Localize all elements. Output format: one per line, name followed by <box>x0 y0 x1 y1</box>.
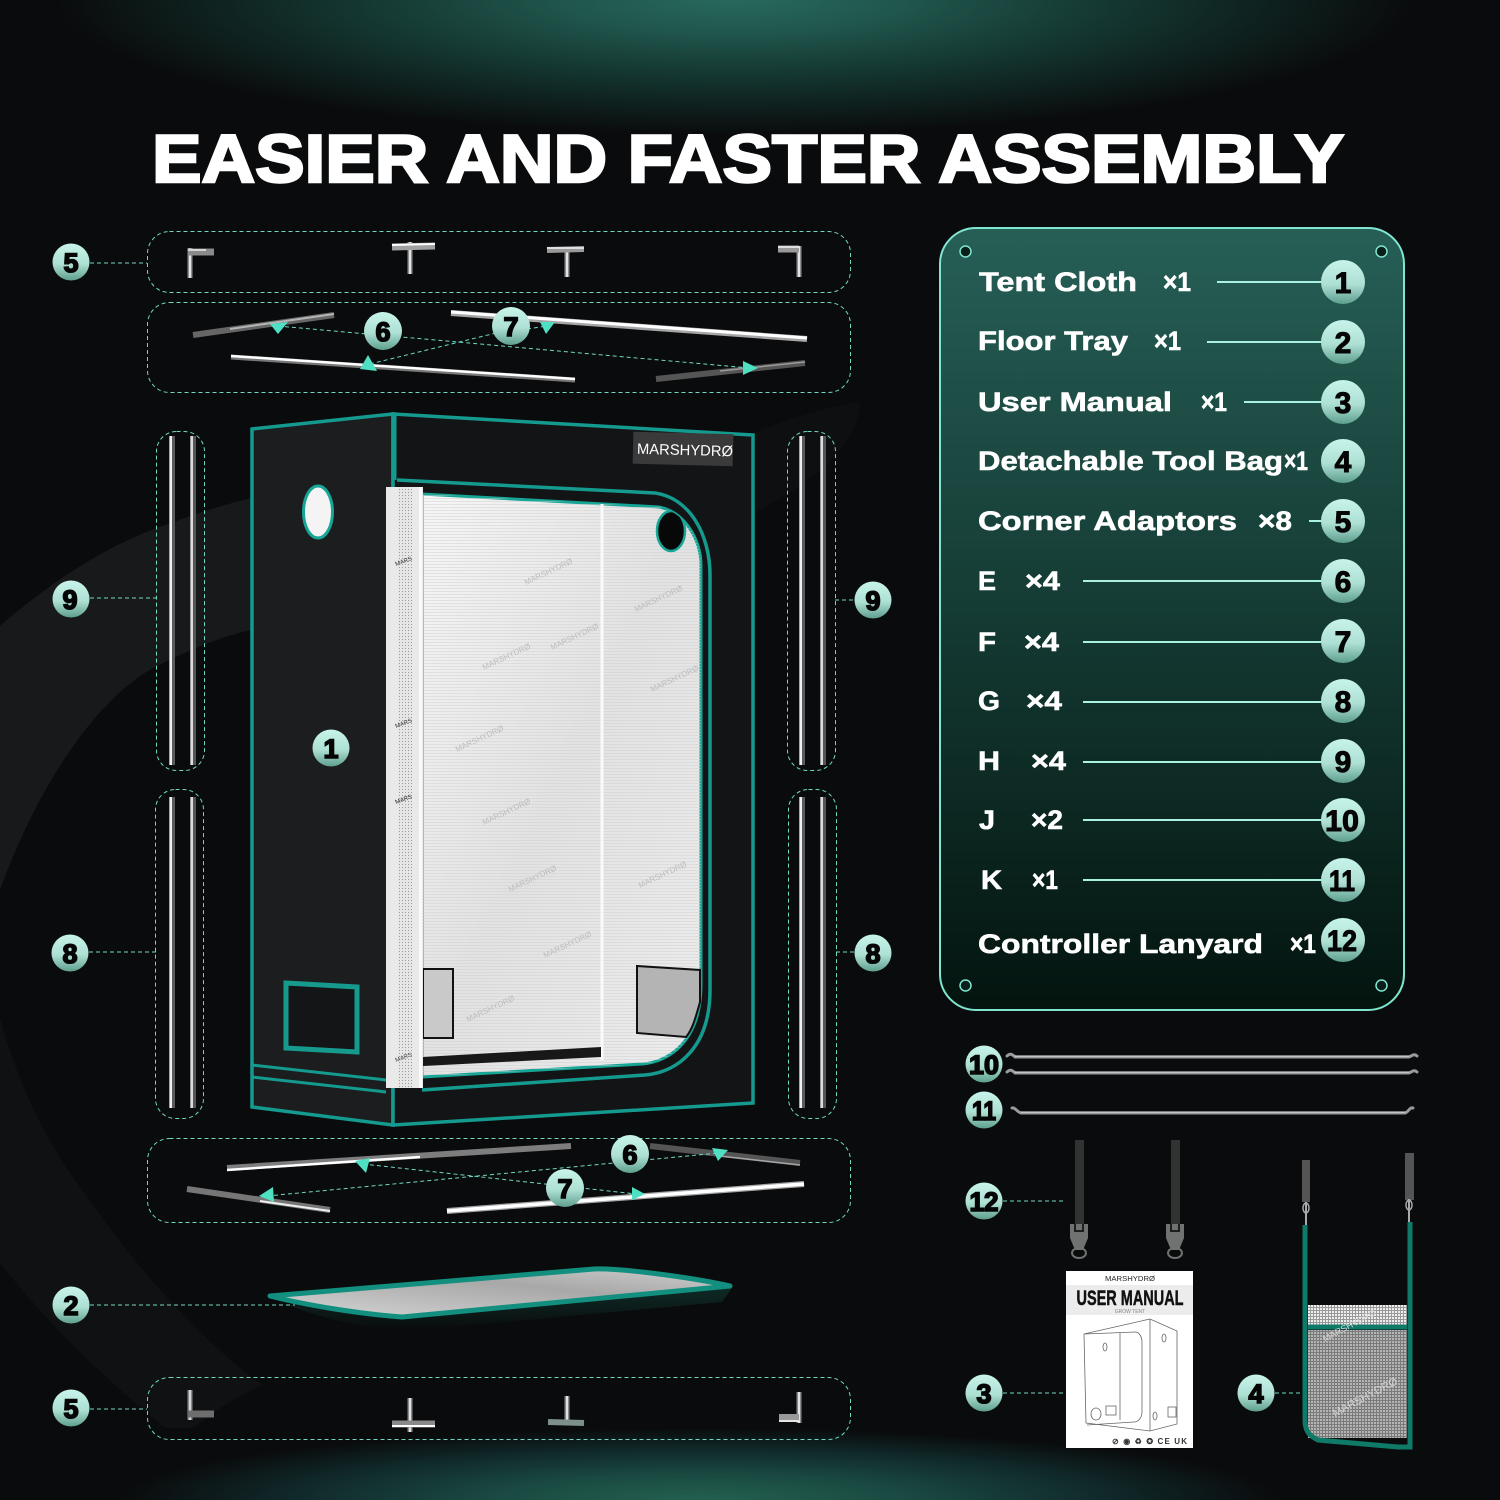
row 7 <box>978 619 1365 663</box>
tent front panel <box>393 414 753 1125</box>
tent <box>252 414 753 1125</box>
row 8 <box>978 679 1365 723</box>
detachable tool bag: MARSHYDRØ <box>1331 1375 1400 1420</box>
rods J <box>1007 1054 1417 1073</box>
row 12: 12 <box>1327 925 1357 958</box>
adaptor: top left <box>188 248 214 278</box>
row 9: ×4 <box>1031 746 1066 776</box>
side rectangular window <box>286 983 357 1052</box>
row 7: ×4 <box>1024 627 1059 657</box>
title: EASIER AND FASTER ASSEMBLY <box>152 121 1344 197</box>
watermarks: MARSHYDRØ <box>542 930 593 960</box>
badge: 8 left: 8 <box>62 939 78 969</box>
group: right lower tubes G <box>788 790 836 1118</box>
badge: 1 on tent <box>312 730 350 766</box>
badge: 8 right: 8 <box>865 939 881 969</box>
user manual: GROW TENT <box>1115 1309 1145 1315</box>
adaptor: top middle right <box>547 248 584 277</box>
rolled door column: MARS <box>395 1052 413 1064</box>
badge: 7: 7 <box>503 312 519 342</box>
row 11: K <box>981 865 1003 895</box>
row 6: E <box>978 566 996 596</box>
watermarks: MARSHYDRØ <box>633 584 684 614</box>
rod K <box>1012 1108 1413 1113</box>
adaptor: top right <box>778 246 799 277</box>
badge: 5 top: 5 <box>63 248 79 278</box>
rolled door column: MARS <box>395 718 413 730</box>
door opening <box>422 494 701 1077</box>
row 2: ×1 <box>1154 326 1181 356</box>
group: left lower tubes G <box>156 790 204 1118</box>
row 12: Controller Lanyard <box>978 929 1263 959</box>
row 8: 8 <box>1335 686 1351 719</box>
panel: upper corner adaptors <box>148 232 850 292</box>
badge: 6: 6 <box>375 317 391 347</box>
row 10: ×2 <box>1031 805 1063 835</box>
row 12 <box>978 918 1365 962</box>
controller lanyard right <box>1166 1140 1184 1258</box>
user manual <box>1066 1271 1193 1448</box>
badge: 6: 6 <box>622 1140 638 1170</box>
adaptor: bottom middle left <box>392 1398 435 1432</box>
badge: 12 <box>966 1182 1002 1220</box>
row 1: Tent Cloth <box>979 267 1137 297</box>
badge: 11 <box>966 1092 1002 1128</box>
adaptor: bottom left <box>188 1390 214 1420</box>
watermarks: MARSHYDRØ <box>637 860 688 890</box>
manual tent drawing <box>1084 1319 1177 1431</box>
tube: upper right F <box>451 312 807 339</box>
adaptor: bottom right <box>779 1392 799 1423</box>
adaptor: bottom middle right <box>548 1396 584 1425</box>
badge: 6 <box>364 312 402 350</box>
side round vent <box>304 486 332 538</box>
door seam <box>600 504 604 1060</box>
badge: 3 <box>966 1374 1002 1412</box>
panel: lower corner adaptors <box>148 1378 850 1440</box>
badge: 7: 7 <box>557 1174 573 1204</box>
watermarks: MARSHYDRØ <box>523 557 574 587</box>
row 3: ×1 <box>1201 387 1227 417</box>
door outer trim <box>397 480 710 1090</box>
row 11: ×1 <box>1032 865 1058 895</box>
row 4: 4 <box>1335 446 1352 479</box>
row 9: 9 <box>1335 746 1351 779</box>
badge: 4 <box>1238 1374 1274 1412</box>
tube: upper left F <box>227 1146 571 1170</box>
watermarks: MARSHYDRØ <box>454 724 505 754</box>
row 6 <box>978 559 1365 603</box>
row 11: 11 <box>1329 865 1355 898</box>
lower right window <box>637 966 700 1037</box>
badge: 9 left <box>52 580 90 618</box>
badge: 2: 2 <box>63 1291 79 1321</box>
panel holes <box>960 246 1387 991</box>
arrowheads <box>270 322 758 375</box>
row 5: Corner Adaptors <box>978 506 1237 536</box>
row 8: ×4 <box>1026 686 1062 716</box>
logo plate <box>633 432 734 466</box>
badge: 5 top <box>52 244 90 280</box>
adaptor: top middle left <box>392 242 435 274</box>
panel: parts list <box>940 228 1404 1010</box>
row 9 <box>978 739 1365 783</box>
badge: 2 <box>52 1286 90 1324</box>
row 2: Floor Tray <box>978 326 1128 356</box>
row 5 <box>978 499 1365 543</box>
row 3 <box>978 380 1365 424</box>
panel: upper tubes E and F <box>148 302 850 392</box>
watermarks <box>454 557 700 1024</box>
user manual: USER MANUAL <box>1076 1287 1184 1310</box>
badge: 9 right <box>854 582 892 618</box>
row 11 <box>981 858 1365 902</box>
badge: 7 <box>492 307 530 345</box>
row 7: 7 <box>1335 626 1351 659</box>
row 10: 10 <box>1325 805 1359 838</box>
badge: 9 left: 9 <box>62 585 78 615</box>
row 7: F <box>978 627 996 657</box>
row 8: G <box>978 686 1000 716</box>
badge: 5 bottom: 5 <box>63 1394 79 1424</box>
detachable tool bag: MARSHYDRØ <box>1321 1307 1378 1344</box>
badge: 4: 4 <box>1248 1379 1264 1409</box>
side bottom bands <box>252 1065 386 1092</box>
row 10: J <box>979 805 995 835</box>
tube: lower left F <box>231 356 575 380</box>
tube: lower right F <box>447 1184 804 1211</box>
leader lines <box>267 1153 719 1196</box>
detachable tool bag <box>1302 1153 1414 1447</box>
arrowheads <box>259 1148 728 1202</box>
rolled door column <box>386 487 423 1088</box>
badge: 10: 10 <box>969 1050 999 1080</box>
badge: 9 right: 9 <box>865 586 881 616</box>
row 6: 6 <box>1335 566 1351 599</box>
badge: 11: 11 <box>972 1096 996 1126</box>
floor strip <box>423 1047 601 1066</box>
tent side panel <box>252 414 393 1125</box>
badge: 3: 3 <box>976 1379 992 1409</box>
lower left window <box>423 969 453 1038</box>
badge: 1 on tent: 1 <box>323 734 339 764</box>
leader: left badges <box>89 263 1302 1409</box>
tube: lower left E <box>187 1189 330 1211</box>
bag trim <box>1305 1222 1410 1447</box>
badge: 8 left <box>52 934 88 972</box>
rolled door column: MARS <box>395 556 413 568</box>
badge: 8 right <box>854 934 892 972</box>
row 4: Detachable Tool Bag <box>978 446 1283 476</box>
manual certification marks: ⊘ ◉ ♻ ✪ CE UK <box>1112 1437 1187 1446</box>
row 5: 5 <box>1335 506 1351 539</box>
tray underside <box>285 1288 732 1331</box>
row 9: H <box>978 746 1000 776</box>
row 4: ×1 <box>1284 446 1308 476</box>
leader lines <box>278 326 749 368</box>
badge: 6 <box>611 1135 649 1173</box>
tube: upper left E <box>193 314 334 335</box>
row 12: ×1 <box>1290 929 1316 959</box>
row 10 <box>979 798 1365 842</box>
user manual: MARSHYDRØ <box>1105 1276 1156 1283</box>
watermarks: MARSHYDRØ <box>549 622 600 652</box>
watermarks: MARSHYDRØ <box>481 642 532 672</box>
badge: 5 bottom <box>52 1390 90 1426</box>
tube: upper right E <box>650 1146 800 1165</box>
group: right upper tubes H <box>788 432 836 770</box>
floor tray <box>270 1269 732 1331</box>
row 6: ×4 <box>1025 566 1060 596</box>
rolled door column: MARS <box>395 794 413 806</box>
group: left upper tubes H <box>156 432 204 770</box>
logo plate: MARSHYDRØ <box>637 441 734 460</box>
row 2 <box>978 320 1365 364</box>
tube: lower right E <box>656 362 805 379</box>
badge: 12: 12 <box>970 1187 998 1217</box>
watermarks: MARSHYDRØ <box>465 994 516 1024</box>
row 1: ×1 <box>1163 267 1191 297</box>
row 5: ×8 <box>1258 506 1292 536</box>
controller lanyard left <box>1070 1140 1088 1258</box>
door top-right vent <box>657 511 685 551</box>
row 1 <box>979 260 1365 304</box>
watermarks: MARSHYDRØ <box>481 797 532 827</box>
badge: 10 <box>966 1046 1002 1082</box>
row 2: 2 <box>1335 327 1351 360</box>
row 3: 3 <box>1335 387 1351 420</box>
bag straps <box>1302 1153 1414 1225</box>
panel: lower tubes E and F <box>148 1135 850 1222</box>
watermarks: MARSHYDRØ <box>649 664 700 694</box>
row 1: 1 <box>1335 267 1351 300</box>
row 4 <box>978 439 1365 483</box>
badge: 7 <box>546 1169 584 1207</box>
row 3: User Manual <box>978 387 1172 417</box>
bag pocket <box>1308 1305 1407 1438</box>
watermarks: MARSHYDRØ <box>507 864 558 894</box>
tray inner with rim <box>270 1269 730 1317</box>
